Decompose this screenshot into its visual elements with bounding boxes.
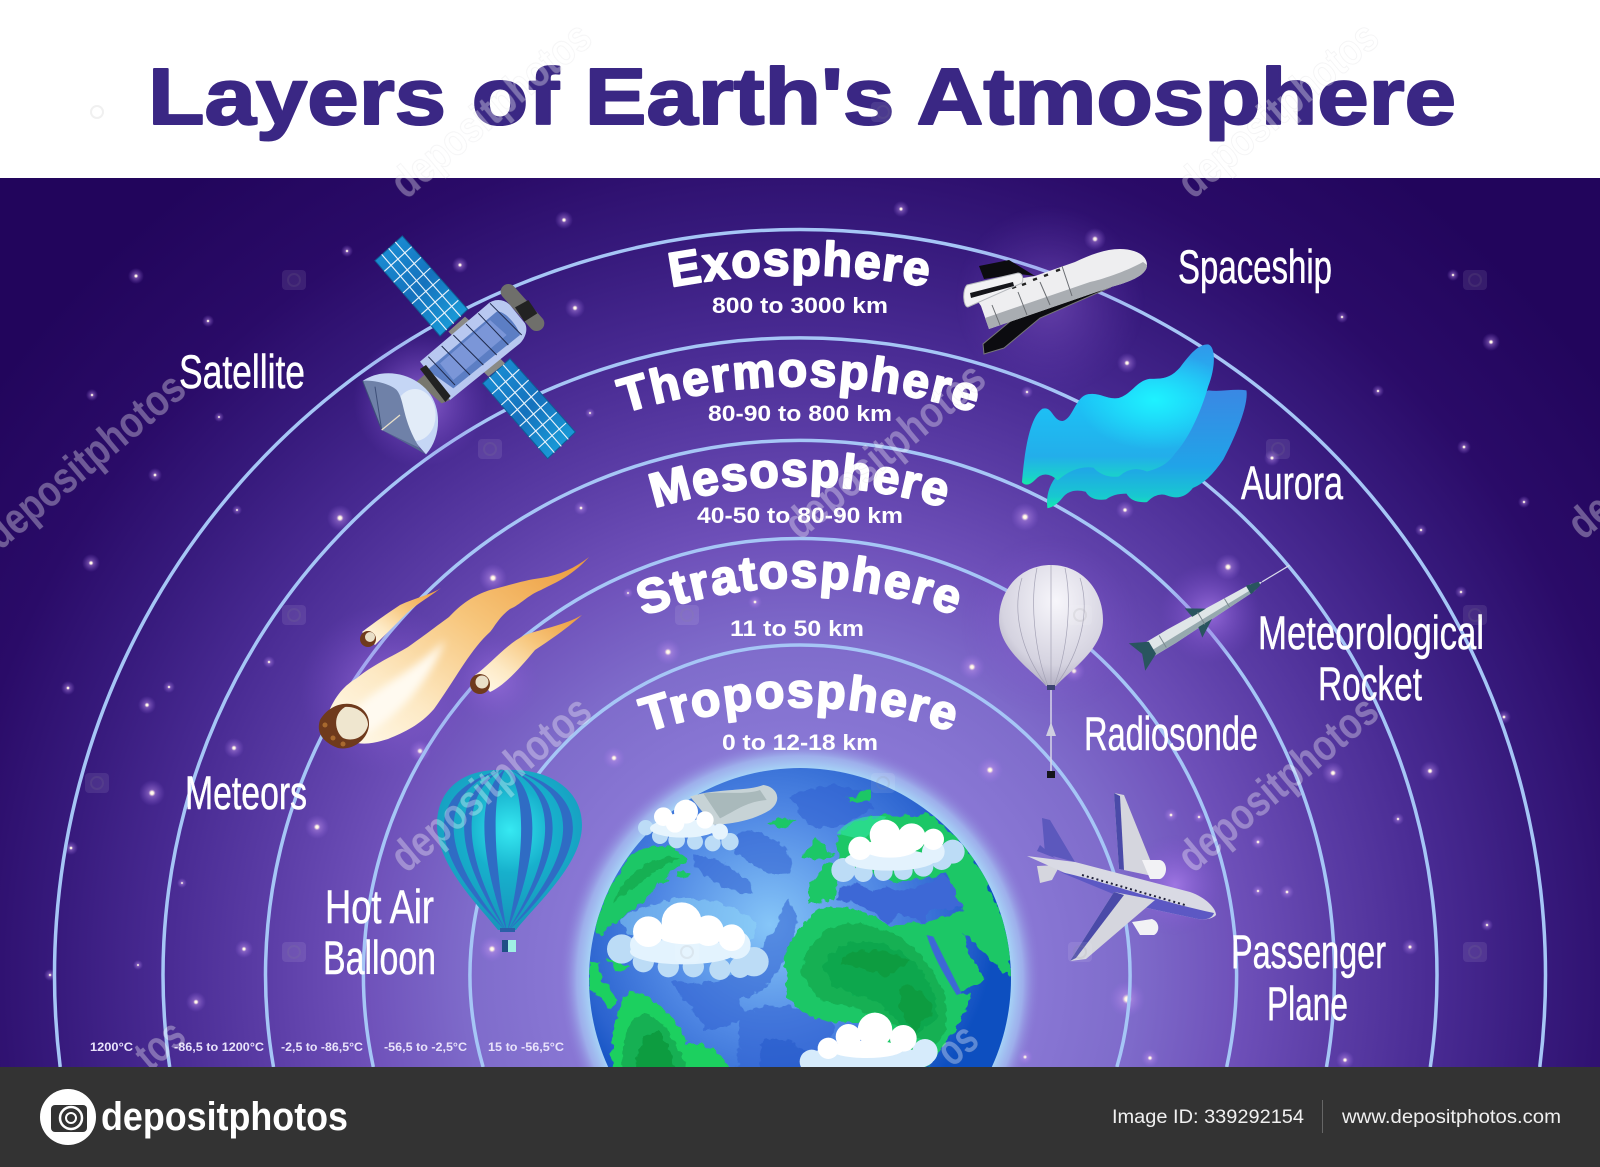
icon: meteors — [300, 557, 589, 775]
icon: hot air balloon — [437, 768, 582, 952]
icon: passenger plane — [1027, 793, 1225, 961]
temperature scale: -56,5 to -2,5°C — [384, 1040, 467, 1054]
Thermosphere altitude: 80-90 to 800 km — [708, 401, 892, 426]
cloud: bottom — [800, 1013, 938, 1074]
atmosphere boundary rings — [55, 229, 1546, 1067]
label: Passenger: Passenger — [1231, 925, 1386, 978]
icon: meteorological rocket — [1111, 522, 1315, 700]
Mesosphere altitude: 40-50 to 80-90 km — [697, 503, 903, 528]
label: Rocket: Rocket — [1318, 657, 1422, 710]
cloud: upper right — [831, 820, 965, 882]
icon: depositphotos camera logo — [40, 1089, 96, 1145]
icon: satellite — [353, 236, 575, 467]
footer logo wordmark: depositphotos — [101, 1095, 348, 1139]
Exosphere label: Exosphere — [668, 240, 929, 288]
watermark: depositphotos — [1168, 686, 1388, 882]
meteor: large — [319, 557, 589, 748]
Stratosphere label: Stratosphere — [636, 554, 960, 614]
label: Radiosonde: Radiosonde — [1084, 707, 1258, 760]
label: Aurora: Aurora — [1241, 456, 1344, 509]
watermark: depositphotos — [775, 353, 995, 549]
panel: footer bar — [0, 1067, 1600, 1167]
label: Satellite: Satellite — [179, 345, 305, 398]
white title background — [0, 0, 1600, 178]
annotation labels — [179, 240, 1484, 1030]
layer names and altitude ranges — [614, 240, 978, 755]
website: www.depositphotos.com — [1341, 1107, 1561, 1128]
footer divider — [1322, 1100, 1323, 1133]
Stratosphere altitude: 11 to 50 km — [730, 616, 864, 641]
temperature scale: 1200°C — [90, 1040, 133, 1054]
label: Meteorological: Meteorological — [1258, 606, 1484, 659]
label: Balloon: Balloon — [323, 931, 436, 984]
icon: aurora — [1022, 344, 1247, 508]
temperature scale: -86,5 to 1200°C — [174, 1040, 264, 1054]
meteor: lower small — [470, 615, 582, 694]
Thermosphere label: Thermosphere — [614, 354, 978, 411]
temperature scale: -2,5 to -86,5°C — [281, 1040, 363, 1054]
temperature scale: 15 to -56,5°C — [488, 1040, 564, 1054]
cloud: grey storm — [690, 785, 777, 825]
panel: atmosphere background — [0, 178, 1600, 1067]
image id: Image ID: 339292154 — [1112, 1107, 1304, 1128]
temperature scale — [90, 1040, 564, 1054]
Troposphere label: Troposphere — [636, 674, 956, 730]
label: Plane: Plane — [1267, 977, 1348, 1030]
Exosphere altitude: 800 to 3000 km — [712, 293, 888, 318]
title: Layers of Earth's Atmosphere — [148, 52, 1456, 141]
earth — [560, 739, 1040, 1074]
watermark: tos — [125, 1010, 195, 1080]
starfield — [44, 201, 1530, 1069]
watermark: os — [927, 1014, 988, 1076]
icon: radiosonde balloon — [961, 535, 1141, 778]
meteor: upper small — [360, 588, 441, 647]
label: Meteors: Meteors — [185, 766, 307, 819]
watermark: depositphotos — [381, 686, 601, 882]
cloud: middle left — [607, 902, 769, 980]
Troposphere altitude: 0 to 12-18 km — [722, 730, 878, 755]
cloud: upper left — [638, 800, 739, 851]
Mesosphere label: Mesosphere — [648, 452, 948, 508]
label: Hot Air: Hot Air — [325, 880, 434, 933]
label: Spaceship: Spaceship — [1178, 240, 1332, 293]
icon: spaceship — [955, 205, 1147, 395]
